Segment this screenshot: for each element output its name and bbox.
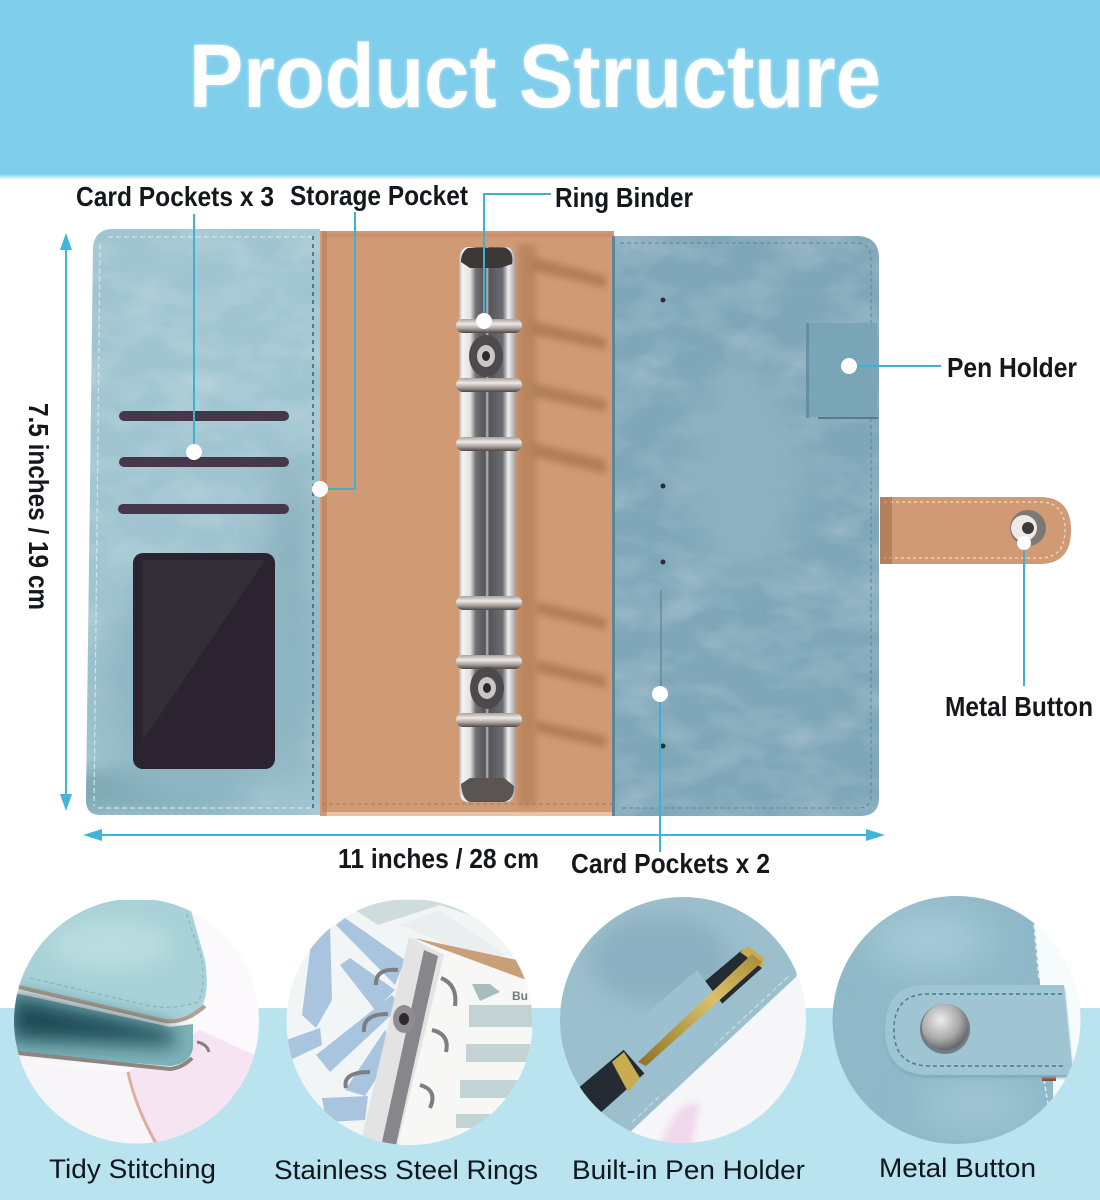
binder diagram (30, 229, 1071, 820)
bottom band (0, 1008, 1100, 1200)
upper rivet (469, 335, 503, 377)
pocket holes (660, 298, 666, 748)
callout: card pockets x 3: Card Pockets x 3 (76, 181, 274, 212)
snap button (920, 1004, 970, 1054)
card slot 1 (119, 411, 289, 421)
pages (400, 1008, 532, 1145)
pen holder strap (624, 970, 722, 1094)
callout: card pockets x 2: Card Pockets x 2 (571, 848, 770, 879)
pen (576, 946, 764, 1115)
detail circle: tidy stitching (14, 900, 259, 1144)
pen holder tab (806, 323, 878, 419)
flap (10, 900, 207, 1020)
panel: binder strap (880, 497, 1071, 564)
title: Product Structure (189, 27, 881, 127)
title: Product Structure (189, 27, 881, 127)
rings spine (360, 937, 444, 1150)
callout: pen holder: Pen Holder (947, 352, 1077, 383)
card slot 2 (119, 457, 289, 467)
callout: ring binder: Ring Binder (555, 182, 693, 213)
inside of cover (10, 992, 193, 1066)
card slot 3 (118, 504, 289, 514)
detail circle: stainless steel rings (286, 899, 540, 1150)
callout: metal button (945, 536, 1093, 722)
ring shadows (530, 256, 606, 748)
caption: tidy stitching: Tidy Stitching (49, 1154, 216, 1184)
width label: 11 inches / 28 cm (338, 843, 539, 874)
caption: metal button: Metal Button (879, 1153, 1036, 1183)
callout: storage pocket (290, 180, 468, 497)
width dimension arrow (83, 829, 885, 841)
ring binder mechanism (456, 247, 522, 802)
caption: built-in pen holder: Built-in Pen Holder (572, 1155, 805, 1185)
height label: 7.5 inches / 19 cm (23, 403, 54, 610)
panel: left cover with card pockets (86, 229, 320, 815)
icon: strap snap button (1010, 510, 1046, 546)
height dimension arrow (60, 233, 72, 811)
snap strap (885, 988, 1073, 1078)
header banner (0, 0, 1100, 180)
rings (456, 319, 522, 727)
detail circle: metal button (825, 890, 1080, 1150)
panel: center lining (320, 231, 614, 816)
panel: right cover (612, 236, 880, 816)
callout: storage pocket: Storage Pocket (290, 180, 468, 211)
ID window (133, 553, 275, 769)
detail circle: stainless steel rings: Bu (512, 989, 528, 1003)
pen clip (638, 954, 762, 1066)
callout: ring binder (476, 182, 693, 329)
callout: pen holder (841, 352, 1077, 383)
detail circle: built-in pen holder (560, 897, 806, 1143)
callout: card pockets x 2 (571, 686, 770, 879)
caption: stainless steel rings: Stainless Steel Rings (274, 1155, 538, 1185)
lower rivet (470, 667, 504, 709)
callout: card pockets x 3 (76, 181, 274, 460)
